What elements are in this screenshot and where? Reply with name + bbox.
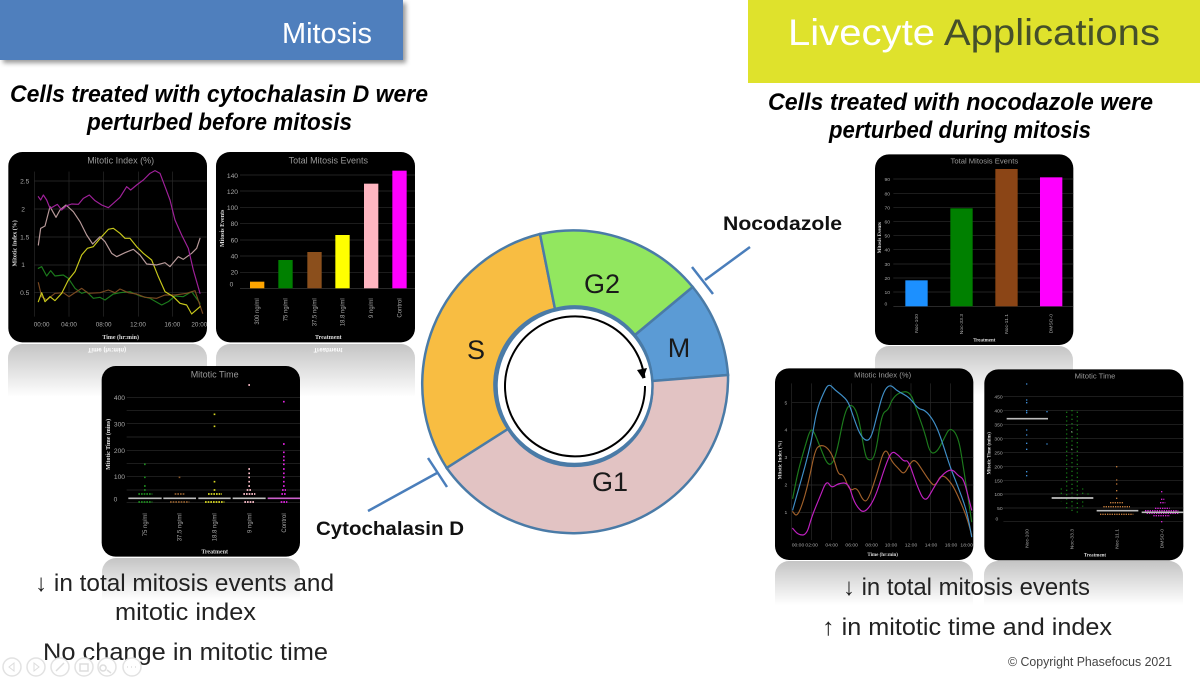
y axis ticks: 100 xyxy=(227,205,238,212)
left heading: Cells treated with cytochalasin D were xyxy=(10,81,428,108)
y axis ticks: 200 xyxy=(114,448,125,455)
chart: Total Mitosis Events, nocodazole xyxy=(875,154,1073,345)
left conclusions: mitotic index xyxy=(115,599,256,626)
right heading xyxy=(768,89,1153,144)
x axis ticks: 9 ng/ml xyxy=(247,513,253,533)
inhibitor marker: Nocodazole: Nocodazole xyxy=(723,214,842,235)
y axis ticks: 0 xyxy=(885,301,888,307)
axis titles: Time (hr:min) xyxy=(867,553,898,558)
x axis ticks: 9 ng/ml xyxy=(369,298,375,318)
axis titles: Mitotic Index (%) xyxy=(12,220,19,266)
segment: G2 xyxy=(540,230,693,335)
left heading xyxy=(10,81,428,136)
y axis ticks: 3 xyxy=(785,455,788,461)
x axis ticks: 18.8 ng/ml xyxy=(213,513,219,541)
chart title: Mitotic Time xyxy=(191,369,239,379)
left conclusions: No change in mitotic time xyxy=(43,639,328,666)
data points xyxy=(1026,384,1178,522)
y axis ticks: 0.5 xyxy=(20,290,30,297)
y axis ticks xyxy=(884,177,890,307)
y axis ticks: 140 xyxy=(227,173,238,180)
axis titles xyxy=(105,419,228,555)
bars xyxy=(905,169,1062,306)
chart reflections: Time (hr:min) xyxy=(88,346,126,352)
axis titles xyxy=(220,209,342,341)
axis titles: Time (hr:min) xyxy=(102,334,139,341)
y axis ticks: 60 xyxy=(231,237,238,244)
x axis ticks: 14:00 xyxy=(925,543,937,549)
y axis ticks: 2.5 xyxy=(20,178,30,185)
inhibitor marker: Cytochalasin D: Cytochalasin D xyxy=(316,519,464,540)
axis titles xyxy=(12,220,139,341)
x axis ticks xyxy=(914,314,1055,334)
left heading: perturbed before mitosis xyxy=(86,109,352,136)
axis titles: Mitotic Time (mins) xyxy=(988,432,993,475)
y axis ticks xyxy=(785,400,788,516)
chart: Mitotic Index, nocodazole xyxy=(775,368,973,560)
right heading: Cells treated with nocodazole were xyxy=(768,89,1153,116)
y axis ticks xyxy=(20,178,30,297)
axis titles xyxy=(988,432,1106,559)
y axis ticks: 4 xyxy=(785,428,788,434)
data points xyxy=(138,385,287,502)
bars xyxy=(250,171,407,288)
axis titles xyxy=(778,440,898,558)
left conclusions xyxy=(35,570,334,666)
header: Mitosis: Mitosis xyxy=(282,18,372,50)
x axis ticks: 04:00 xyxy=(825,543,838,549)
y axis ticks: 400 xyxy=(994,409,1003,415)
right conclusions: ↓ in total mitosis events xyxy=(843,574,1090,601)
x axis ticks: 08:00 xyxy=(96,322,112,329)
header: Mitosis xyxy=(0,0,403,60)
y axis ticks xyxy=(994,395,1003,523)
x axis ticks: 18.8 ng/ml xyxy=(340,298,346,326)
chart title: Total Mitosis Events xyxy=(289,155,369,165)
x axis ticks: 37.5 ng/ml xyxy=(178,513,184,541)
x axis ticks: 00:00 xyxy=(34,322,50,329)
y axis ticks: 1 xyxy=(21,262,25,269)
x axis ticks: 12:00 xyxy=(130,322,146,329)
y axis ticks: 300 xyxy=(994,437,1003,443)
y axis ticks: 50 xyxy=(997,506,1003,512)
phase labels: G1 xyxy=(592,467,628,497)
series lines xyxy=(793,385,972,537)
axis titles: Mitosis Events xyxy=(878,222,883,253)
chart: Mitotic Index, cytochalasin D xyxy=(8,152,208,342)
y axis ticks: 1 xyxy=(785,510,788,516)
series lines xyxy=(38,171,203,314)
x axis ticks: 00:00 xyxy=(792,543,804,549)
y axis ticks: 100 xyxy=(994,492,1003,498)
x axis ticks: 18:00 xyxy=(960,543,973,549)
chart reflections: Treatment xyxy=(314,346,342,352)
y axis ticks: 350 xyxy=(994,423,1003,429)
axis titles: Mitosis Events xyxy=(220,209,226,247)
right heading: perturbed during mitosis xyxy=(828,117,1091,144)
y axis ticks: 30 xyxy=(884,262,890,268)
y axis ticks: 20 xyxy=(231,270,238,277)
segment: G1 xyxy=(447,375,728,533)
right conclusions: ↑ in mitotic time and index xyxy=(822,614,1112,641)
segment: S xyxy=(422,234,555,468)
y axis ticks: 300 xyxy=(114,421,125,428)
x axis ticks: 37.5 ng/ml xyxy=(312,298,318,326)
inner ring xyxy=(496,308,652,464)
phase labels xyxy=(467,269,690,497)
x axis ticks: 02:00 xyxy=(805,543,818,549)
y axis ticks: 80 xyxy=(231,221,238,228)
y axis ticks: 1.5 xyxy=(20,234,30,241)
y axis ticks: 40 xyxy=(884,248,890,254)
right conclusions xyxy=(822,574,1112,641)
chart title: Total Mitosis Events xyxy=(951,156,1018,165)
chart: Mitotic Time, cytochalasin D xyxy=(102,366,300,557)
inhibitor marker: Cytochalasin D xyxy=(316,458,464,540)
y axis ticks: 2 xyxy=(785,483,788,489)
left conclusions: ↓ in total mitosis events and xyxy=(35,570,334,597)
y axis ticks xyxy=(227,173,238,289)
y axis ticks xyxy=(114,395,125,504)
chart title: Mitotic Index (%) xyxy=(854,370,912,379)
y axis ticks: 50 xyxy=(884,234,890,240)
header: Livecyte Applications: Livecyte Applications xyxy=(788,12,1160,53)
y axis ticks: 20 xyxy=(884,276,890,282)
chart title: Mitotic Index (%) xyxy=(87,155,154,165)
y axis ticks: 40 xyxy=(231,253,238,260)
presentation controls xyxy=(3,658,141,676)
x axis ticks: 08:00 xyxy=(865,543,878,549)
x axis ticks: DMSO-0 xyxy=(1160,529,1166,548)
y axis ticks: 10 xyxy=(884,290,890,296)
axis titles: Treatment xyxy=(973,338,996,343)
x axis ticks xyxy=(34,322,208,329)
y axis ticks: 2 xyxy=(21,206,25,213)
chart reflections xyxy=(8,344,1183,605)
y axis ticks: 450 xyxy=(994,395,1003,401)
y axis ticks: 70 xyxy=(884,205,890,211)
x axis ticks: Control xyxy=(282,513,288,533)
x axis ticks: DMSO-0 xyxy=(1049,314,1055,333)
axis titles: Treatment xyxy=(1084,554,1106,559)
axis titles xyxy=(878,222,996,343)
y axis ticks: 200 xyxy=(994,464,1003,470)
x axis ticks xyxy=(255,298,404,326)
y axis ticks: 60 xyxy=(884,219,890,225)
x axis ticks: Noc-11.1 xyxy=(1004,314,1010,334)
x axis ticks: Noc-11.1 xyxy=(1115,529,1121,549)
axis titles: Treatment xyxy=(201,549,228,555)
y axis ticks: 100 xyxy=(114,474,125,481)
y axis ticks: 150 xyxy=(994,478,1003,484)
cell cycle diagram xyxy=(422,230,728,533)
x axis ticks: 75 ng/ml xyxy=(284,298,290,321)
x axis ticks xyxy=(1025,529,1166,549)
x axis ticks: Noc-100 xyxy=(1025,529,1031,548)
x axis ticks: 12:00 xyxy=(905,543,917,549)
segment: M xyxy=(635,287,728,381)
x axis ticks: Noc-33.3 xyxy=(1070,529,1076,549)
y axis ticks: 400 xyxy=(114,395,125,402)
x axis ticks: 16:00 xyxy=(164,322,181,329)
axis titles: Mitotic Time (mins) xyxy=(105,419,112,470)
copyright: © Copyright Phasefocus 2021 xyxy=(1008,654,1172,669)
y axis ticks: 250 xyxy=(994,450,1003,456)
chart title: Mitotic Time xyxy=(1075,371,1115,380)
x axis ticks: 75 ng/ml xyxy=(143,513,149,536)
phase labels: G2 xyxy=(584,269,620,299)
phase labels: S xyxy=(467,335,485,365)
x axis ticks: 04:00 xyxy=(61,322,77,329)
x axis ticks xyxy=(143,513,288,541)
x axis ticks: Control xyxy=(398,298,404,318)
y axis ticks: 120 xyxy=(227,189,238,196)
x axis ticks: 16:00 xyxy=(945,543,957,549)
chart: Mitotic Time, nocodazole xyxy=(984,369,1183,560)
x axis ticks: Noc-100 xyxy=(914,314,920,333)
axis titles: Treatment xyxy=(315,335,342,341)
x axis ticks xyxy=(792,543,973,549)
x axis ticks: 10:00 xyxy=(885,543,897,549)
axis titles: Mitotic Index (%) xyxy=(778,440,783,479)
header: Livecyte Applications xyxy=(748,0,1200,83)
x axis ticks: 06:00 xyxy=(845,543,858,549)
inhibitor marker: Nocodazole xyxy=(692,214,842,294)
y axis ticks: 5 xyxy=(785,400,788,406)
x axis ticks: 300 ng/ml xyxy=(255,298,261,325)
median lines xyxy=(1007,419,1183,512)
y axis ticks: 0 xyxy=(996,517,999,523)
phase labels: M xyxy=(668,333,690,363)
x axis ticks: Noc-33.3 xyxy=(959,314,965,334)
median lines xyxy=(128,496,300,501)
x axis ticks: 20:00 xyxy=(191,322,208,329)
y axis ticks: 0 xyxy=(230,282,234,289)
y axis ticks: 90 xyxy=(884,177,890,183)
y axis ticks: 0 xyxy=(114,497,118,504)
y axis ticks: 80 xyxy=(884,191,890,197)
cycle arrow xyxy=(505,316,647,456)
chart: Total Mitosis Events, cytochalasin D xyxy=(216,152,415,342)
